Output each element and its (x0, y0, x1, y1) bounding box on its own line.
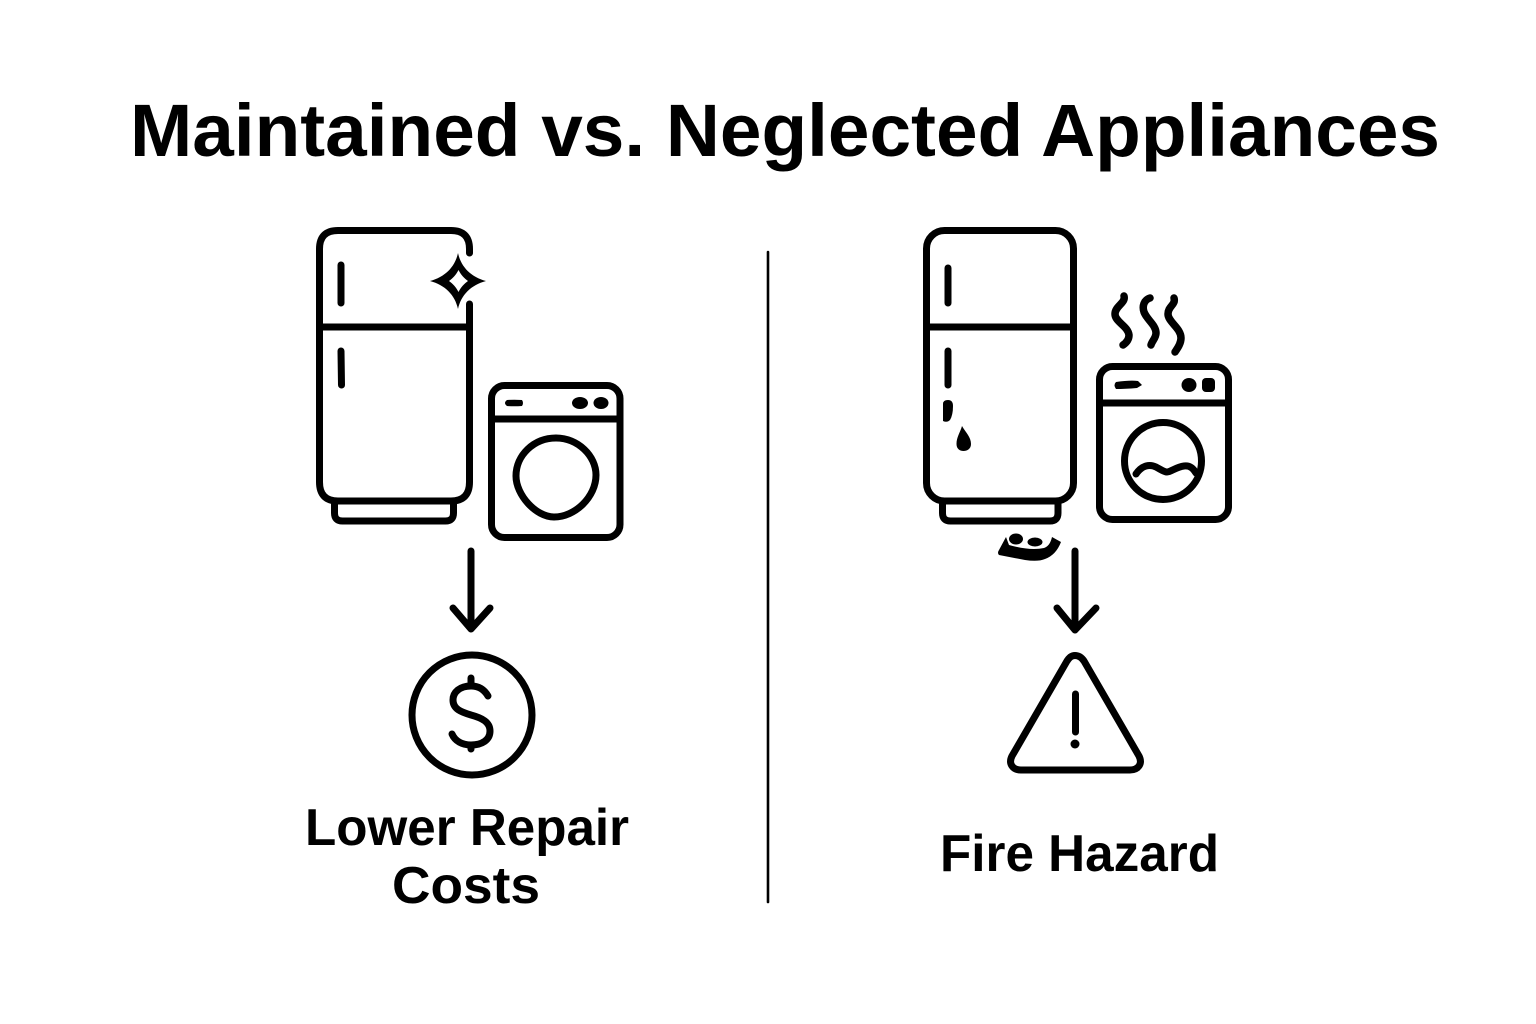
icon: puddle (998, 534, 1061, 561)
icon: steam (1115, 296, 1181, 352)
label: fire hazard: Fire Hazard (940, 825, 1219, 883)
icon: clean refrigerator (320, 230, 470, 521)
center divider (767, 252, 769, 902)
icon: warning triangle (1011, 656, 1140, 770)
icon: clean washing machine (492, 386, 620, 538)
arrow: neglected to hazard (1057, 551, 1096, 630)
arrow: maintained to savings (453, 551, 490, 629)
panel: neglected (926, 230, 1228, 883)
icon: dollar coin (412, 655, 532, 775)
title: Maintained vs. Neglected Appliances (130, 89, 1440, 172)
label: lower repair costs: Costs (392, 857, 540, 915)
label: lower repair costs: Lower Repair (305, 799, 629, 857)
icon: sparkle (430, 253, 486, 309)
panel: maintained (305, 230, 643, 915)
icon: leaking refrigerator (926, 230, 1074, 521)
icon: overheating washing machine (1100, 366, 1228, 520)
